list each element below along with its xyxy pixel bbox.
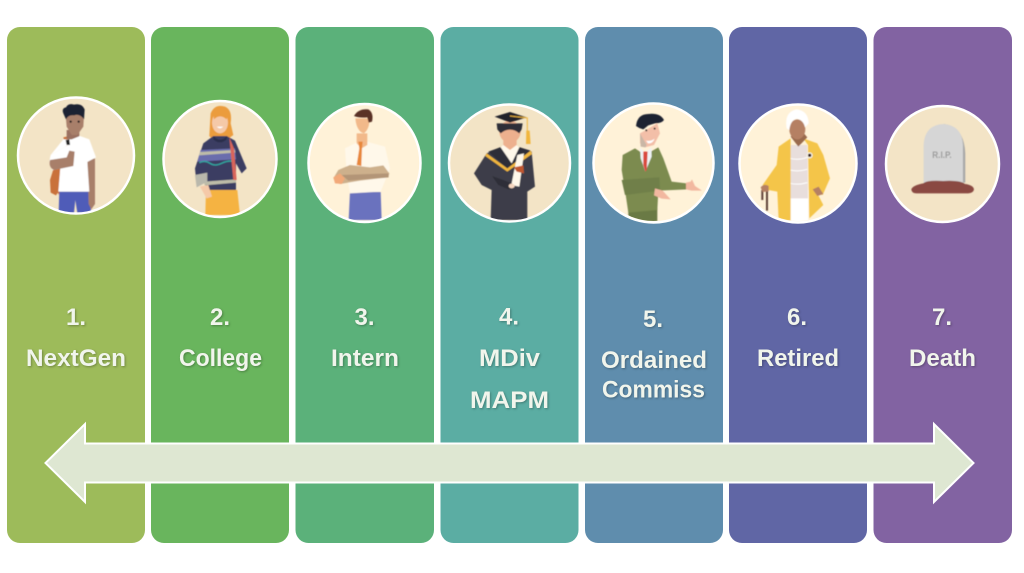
- label: 3. Intern: Intern: [331, 345, 399, 372]
- label: 7. Death: 7.: [932, 304, 952, 331]
- label: 4. MDiv MAPM: 4.: [499, 304, 519, 330]
- panel: College: [151, 27, 289, 543]
- icon: man in green suit: [594, 104, 714, 222]
- label: 5. Ordained Commiss: Ordained: [601, 347, 707, 374]
- label: 6. Retired: 6.: [787, 304, 807, 331]
- label: 1. NextGen: [26, 304, 126, 372]
- column 6: Retired: [729, 27, 867, 543]
- label: 6. Retired: Retired: [757, 345, 839, 372]
- label: 2. College: [179, 304, 262, 372]
- panel: Ordained Commiss: [585, 27, 723, 543]
- label: 4. MDiv MAPM: MDiv: [479, 345, 541, 372]
- panel: NextGen: [7, 27, 145, 543]
- icon: tombstone: R.I.P.: [932, 150, 952, 160]
- column 5: Ordained Commiss: [585, 27, 723, 543]
- label: 3. Intern: 3.: [354, 304, 375, 331]
- icon: tombstone: [886, 106, 999, 222]
- label: 5. Ordained Commiss: Commiss: [602, 376, 705, 404]
- label: 7. Death: [909, 304, 976, 372]
- label: 4. MDiv MAPM: MAPM: [470, 387, 549, 414]
- icon: intern with folded arms: [308, 104, 420, 222]
- icon: graduate with diploma: [449, 104, 570, 222]
- column 1: NextGen: [7, 27, 145, 543]
- label: 2. College: College: [179, 345, 262, 372]
- arrow: double-headed timeline arrow: [46, 424, 974, 502]
- column 7: Death: [874, 27, 1012, 543]
- label: 5. Ordained Commiss: [601, 306, 707, 404]
- icon: retired woman with cane: [740, 104, 856, 222]
- column 2: College: [151, 27, 289, 543]
- label: 2. College: 2.: [210, 304, 230, 331]
- panel: Death: [874, 27, 1012, 543]
- column 3: Intern: [296, 27, 434, 543]
- label: 4. MDiv MAPM: [470, 304, 549, 414]
- panel: Retired: [729, 27, 867, 543]
- icon: student in striped sweater: [164, 101, 276, 217]
- panel: MDiv MAPM: [440, 27, 578, 543]
- label: 1. NextGen: NextGen: [26, 345, 126, 372]
- icon: young man with backpack: [18, 98, 134, 214]
- label: 1. NextGen: 1.: [66, 304, 86, 331]
- panel: Intern: [296, 27, 434, 543]
- label: 7. Death: Death: [909, 345, 976, 372]
- label: 5. Ordained Commiss: 5.: [643, 306, 663, 333]
- label: 3. Intern: [331, 304, 399, 372]
- column 4: MDiv MAPM: [440, 27, 578, 543]
- label: 6. Retired: [757, 304, 839, 372]
